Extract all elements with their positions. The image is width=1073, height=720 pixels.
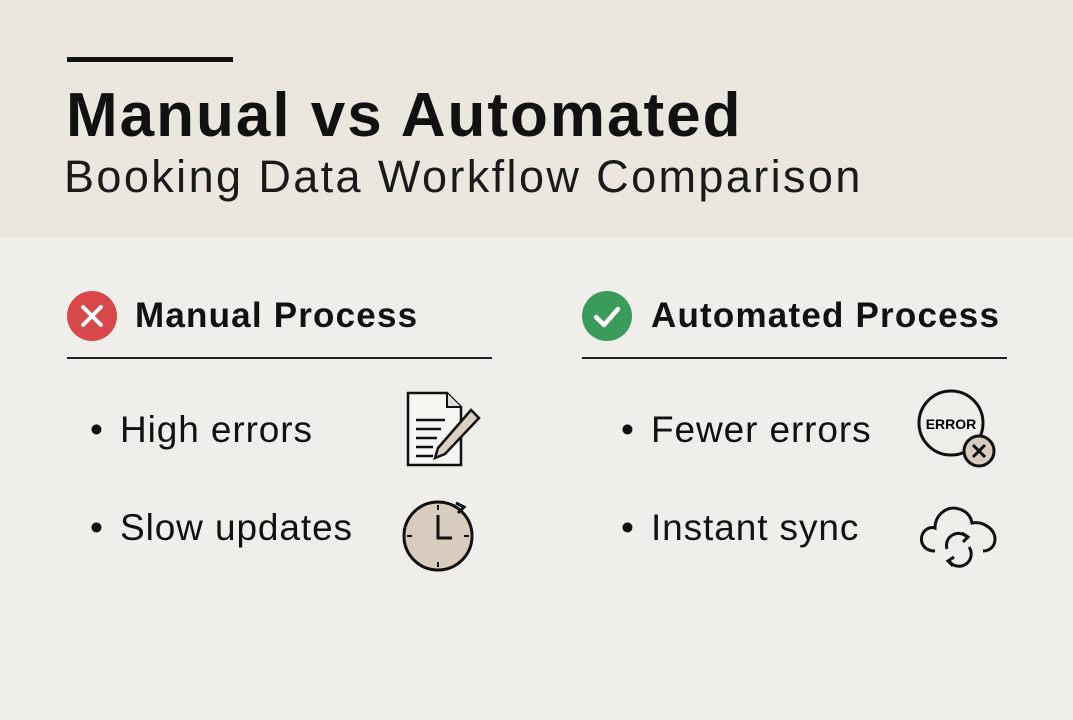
heading: automated: Automated Process: [651, 296, 1000, 335]
bullet: high errors: •: [90, 409, 104, 450]
bullet: fewer errors: •: [621, 409, 635, 450]
bullet: fewer errors: Fewer errors: [651, 409, 872, 450]
panel: manual: [67, 291, 492, 572]
panel: automated: [582, 291, 1007, 568]
subtitle: Booking Data Workflow Comparison: [64, 151, 863, 202]
icon: clock: [402, 500, 474, 572]
accent bar: [67, 57, 233, 62]
icon: cloud sync: [920, 506, 996, 568]
bullet: high errors: High errors: [120, 409, 313, 450]
icon: green check: [582, 291, 632, 341]
icon: red x: [67, 291, 117, 341]
bullet: slow updates: •: [90, 507, 104, 548]
bullet: slow updates: Slow updates: [120, 507, 353, 548]
bullet: instant sync: •: [621, 507, 635, 548]
bullet: instant sync: Instant sync: [651, 507, 859, 548]
icon: document pencil: [406, 392, 481, 466]
icon: error badge: ERROR: [926, 416, 976, 432]
icon: error badge: [918, 390, 996, 468]
title: Manual vs Automated: [66, 81, 742, 150]
heading: manual: Manual Process: [135, 296, 418, 335]
header band: [0, 0, 1073, 238]
